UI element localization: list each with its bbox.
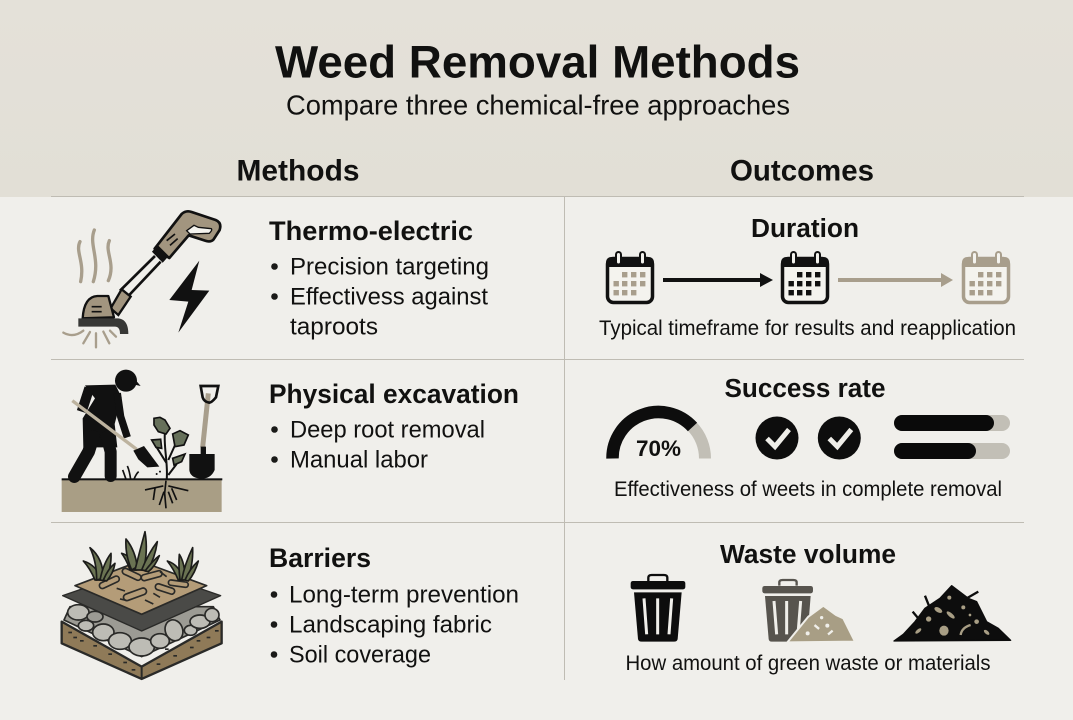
panel: thermo-electric method (63, 211, 489, 347)
icon: calendar middle (781, 252, 829, 302)
panel: barriers method (62, 532, 519, 679)
method title: Physical excavation (269, 379, 519, 409)
method bullets (271, 254, 489, 340)
progress bars (894, 415, 1010, 459)
method title: Thermo-electric (269, 216, 473, 246)
arrow: black (663, 273, 773, 287)
subtitle: Compare three chemical-free approaches (286, 90, 790, 120)
method bullets (271, 582, 519, 668)
method bullets: Landscaping fabric (289, 612, 492, 638)
icon: person digging with shovel (62, 370, 222, 512)
method title: Barriers (269, 543, 371, 573)
icon: check marks (756, 416, 861, 460)
panel: waste volume outcome (626, 539, 1011, 675)
icon: electric weed trimmer (63, 211, 220, 347)
method bullets: Long-term prevention (289, 582, 519, 608)
gauge 70% (612, 412, 705, 461)
method bullets (271, 416, 485, 474)
outcome heading: Waste volume (720, 539, 896, 569)
outcome caption: Effectiveness of weets in complete removal (614, 477, 1002, 501)
icon: calendar end (962, 252, 1010, 302)
panel: physical excavation method (62, 370, 519, 512)
icon: layered barrier cross-section (62, 532, 222, 679)
icon: calendar start (606, 252, 654, 302)
method bullets: taproots (290, 314, 378, 340)
method bullets: Soil coverage (289, 642, 431, 668)
title: Weed Removal Methods (275, 36, 800, 88)
column heading: outcomes: Outcomes (730, 154, 874, 188)
table grid lines (51, 196, 1024, 680)
outcome caption: How amount of green waste or materials (626, 651, 990, 675)
outcome heading: Duration (751, 213, 859, 243)
outcome caption: Typical timeframe for results and reapplication (599, 316, 1016, 340)
column heading: methods: Methods (236, 154, 360, 188)
icon: empty trash can (631, 575, 685, 642)
outcome heading: Success rate (724, 373, 886, 403)
panel: duration outcome (599, 213, 1016, 340)
arrow: tan (838, 273, 953, 287)
method bullets: Precision targeting (290, 254, 489, 280)
method bullets: Deep root removal (290, 416, 485, 444)
method bullets: Effectivess against (290, 284, 488, 310)
panel: success rate outcome (612, 373, 1010, 501)
gauge 70%: 70% (636, 436, 681, 461)
header band (0, 0, 1073, 197)
icon: large waste pile (894, 586, 1011, 641)
method bullets: Manual labor (290, 446, 428, 474)
icon: trash can with small pile (762, 580, 855, 642)
